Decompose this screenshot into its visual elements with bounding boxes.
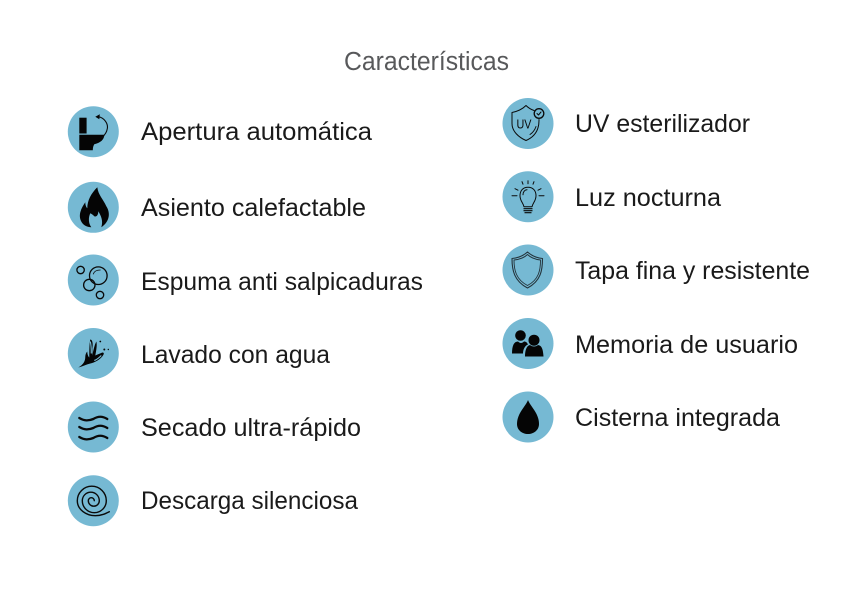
feature: Descarga silenciosa	[68, 475, 358, 526]
label: Lavado con agua	[141, 341, 330, 369]
icon: light bulb	[502, 171, 554, 222]
feature: UV esterilizador	[502, 98, 750, 149]
label: UV esterilizador	[575, 110, 750, 138]
feature: Apertura automática	[68, 106, 372, 157]
feature: Memoria de usuario	[502, 318, 798, 369]
icon: spiral	[68, 475, 119, 526]
label: Descarga silenciosa	[141, 487, 358, 515]
icon: bubbles	[68, 254, 119, 306]
feature: Lavado con agua	[68, 328, 330, 379]
feature: Espuma anti salpicaduras	[68, 254, 423, 306]
icon: water drop	[502, 392, 554, 442]
icon: two users	[502, 318, 554, 369]
label: Memoria de usuario	[575, 331, 798, 359]
icon: shield	[502, 244, 554, 296]
feature: Tapa fina y resistente	[502, 244, 810, 296]
label: Luz nocturna	[575, 184, 721, 212]
label: Tapa fina y resistente	[575, 257, 810, 285]
icon: water splash	[68, 328, 119, 379]
feature: Luz nocturna	[502, 171, 721, 222]
icon: air waves	[68, 402, 119, 452]
feature: Asiento calefactable	[68, 182, 366, 233]
label: Cisterna integrada	[575, 404, 780, 432]
icon: flame	[68, 182, 119, 233]
feature: Secado ultra-rápido	[68, 402, 361, 452]
label: Secado ultra-rápido	[141, 414, 361, 442]
label: Apertura automática	[141, 118, 372, 146]
title: Características	[344, 48, 509, 76]
icon: UV shield with check	[502, 98, 554, 149]
icon: UV shield with check: UV	[516, 116, 532, 132]
label: Asiento calefactable	[141, 194, 366, 222]
feature: Cisterna integrada	[502, 392, 780, 442]
label: Espuma anti salpicaduras	[141, 268, 423, 296]
icon: toilet with opening arrow	[68, 106, 119, 157]
